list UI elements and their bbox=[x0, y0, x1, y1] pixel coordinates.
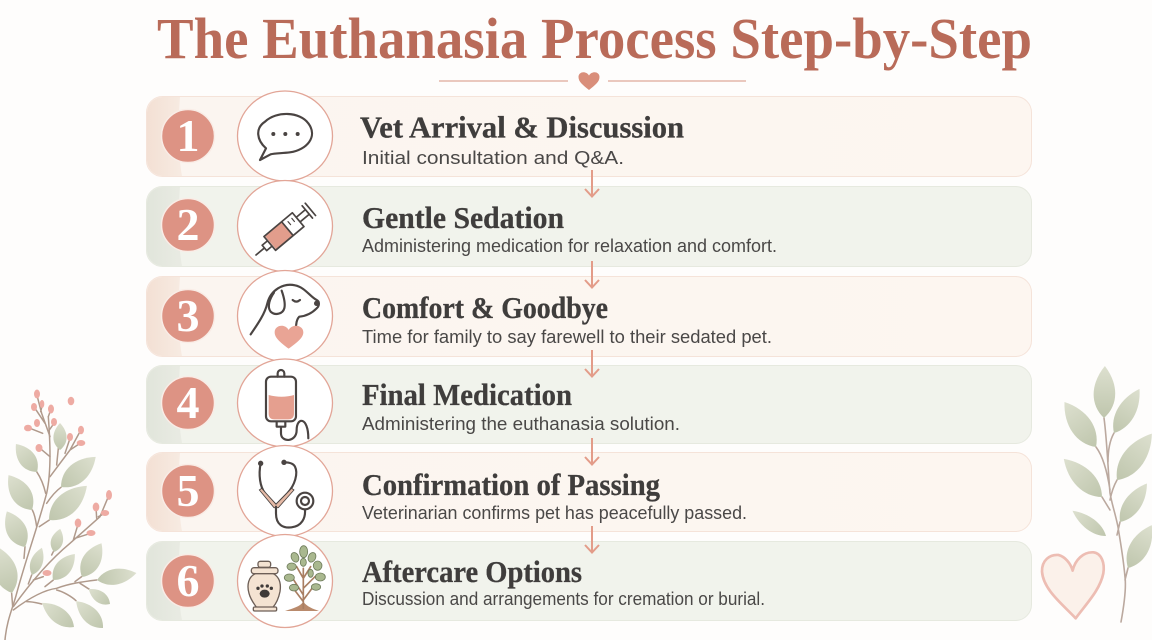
step number 2 bbox=[162, 198, 214, 252]
title: The Euthanasia Process Step-by-Step bbox=[157, 6, 1032, 71]
icon: urn and tree bbox=[238, 534, 332, 628]
panel: step 5 bbox=[146, 452, 1032, 532]
panel: step 3 bbox=[146, 276, 1032, 356]
step number 1: 1 bbox=[176, 110, 200, 161]
heading: step 5: Confirmation of Passing bbox=[362, 467, 660, 502]
icon: dog with heart bbox=[238, 270, 332, 362]
arrow: step 2 to 3 bbox=[585, 261, 599, 288]
description: step 3: Time for family to say farewell to their sedated pet. bbox=[362, 326, 772, 347]
heading: step 1: Vet Arrival & Discussion bbox=[360, 110, 684, 144]
description: step 2: Administering medication for relaxation and comfort. bbox=[362, 235, 777, 256]
decoration: left botanical sprig bbox=[0, 390, 138, 640]
icon: syringe bbox=[238, 180, 332, 272]
step number 6: 6 bbox=[176, 555, 200, 606]
decoration: outlined heart bbox=[1042, 552, 1104, 618]
icon: stethoscope bbox=[238, 446, 332, 536]
icon: speech bubble bbox=[238, 91, 332, 181]
panel: step 4 bbox=[146, 366, 1032, 444]
arrow: step 1 to 2 bbox=[585, 170, 599, 196]
step number 6 bbox=[162, 554, 214, 608]
arrow: step 4 to 5 bbox=[585, 438, 599, 464]
heading: step 4: Final Medication bbox=[362, 377, 572, 412]
title divider with heart bbox=[439, 72, 746, 90]
heading: step 6: Aftercare Options bbox=[362, 554, 582, 589]
step number 5: 5 bbox=[176, 465, 200, 516]
arrow: step 5 to 6 bbox=[585, 526, 599, 552]
description: step 4: Administering the euthanasia solution. bbox=[362, 413, 680, 434]
arrow: step 3 to 4 bbox=[585, 350, 599, 376]
step number 3 bbox=[162, 290, 214, 342]
icon: IV bag bbox=[238, 359, 332, 447]
description: step 5: Veterinarian confirms pet has peacefully passed. bbox=[362, 502, 747, 523]
step number 2: 2 bbox=[176, 199, 200, 250]
panel: step 1 bbox=[146, 96, 1032, 176]
heading: step 3: Comfort & Goodbye bbox=[362, 290, 608, 325]
step number 1 bbox=[162, 110, 214, 162]
step number 5 bbox=[162, 464, 214, 518]
description: step 6: Discussion and arrangements for cremation or burial. bbox=[362, 588, 765, 609]
description: step 1: Initial consultation and Q&A. bbox=[362, 147, 624, 168]
heading: step 2: Gentle Sedation bbox=[362, 200, 564, 235]
panel: step 6 bbox=[146, 542, 1032, 620]
decoration: right botanical sprig bbox=[1056, 366, 1152, 622]
step number 4 bbox=[162, 376, 214, 430]
step number 3: 3 bbox=[176, 290, 200, 341]
panel: step 2 bbox=[146, 186, 1032, 266]
step number 4: 4 bbox=[176, 377, 200, 428]
